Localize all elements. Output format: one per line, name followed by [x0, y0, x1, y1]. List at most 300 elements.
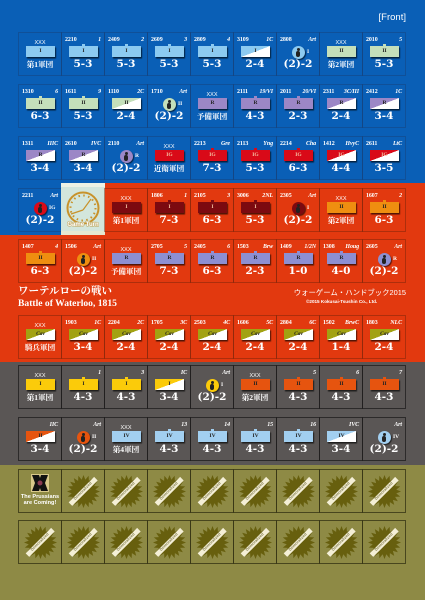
counter: IC: I	[168, 381, 171, 387]
counter: 2011: 2-3	[288, 110, 307, 122]
counter: IV artillery: (2)-2	[370, 443, 398, 455]
counter: French 1st HQ dark	[104, 188, 148, 232]
counter: 3109: 2-4	[246, 58, 264, 70]
counter: Guard Army HQ	[147, 136, 191, 180]
counter: IVC	[319, 417, 363, 461]
counter: 1903: 1903	[65, 320, 77, 326]
counter: IV 13	[147, 417, 191, 461]
marker 6: Demoralized	[287, 481, 308, 501]
counter: 1710 artillery	[147, 84, 191, 128]
counter: 2110 artillery: Art	[136, 141, 144, 147]
counter: IV 14: 14	[224, 422, 230, 428]
counter: II artillery	[61, 417, 105, 461]
counter: 2405: 6	[227, 244, 230, 250]
counter: 2213: 2213	[194, 141, 206, 147]
counter: II 5: 5	[313, 370, 316, 376]
marker 13: Demoralized	[201, 532, 222, 552]
counter: 1606: 1606	[237, 320, 249, 326]
counter: 1412: 4-4	[332, 162, 350, 174]
counter: 1506 artillery: 1506	[65, 244, 77, 250]
marker 10: Demoralized	[72, 532, 93, 552]
marker 2: Demoralized	[115, 481, 136, 501]
counter: 1506 artillery: Art	[93, 244, 101, 250]
label: Front: [Front]	[379, 12, 406, 23]
counter: 1st HQ yellow: 第1軍団	[27, 393, 53, 402]
counter: 2808 artillery: I	[307, 49, 309, 55]
counter: 2213: 7-3	[202, 162, 221, 174]
counter: 2204: Cav	[122, 331, 131, 337]
counter: 2610: 3-4	[74, 162, 92, 174]
counter: II 7: 4-3	[374, 391, 393, 403]
counter: 2412: R	[382, 100, 386, 106]
counter: 3109: 3109	[237, 37, 249, 43]
panel: gray counters	[18, 365, 406, 461]
marker 12	[147, 520, 191, 564]
marker 16: Demoralized	[330, 532, 351, 552]
counter: 3006: 5-3	[246, 214, 264, 226]
counter: I artillery	[190, 365, 234, 409]
counter: 2011: 2011	[280, 89, 291, 95]
counter: 1506 artillery: (2)-2	[69, 265, 97, 277]
counter: 2211 artillery: IG	[49, 205, 55, 211]
counter: II 6: 6	[356, 370, 359, 376]
publication credit: ウォーゲーム・ハンドブック2015	[294, 288, 406, 297]
marker 7: Demoralized	[330, 481, 351, 501]
counter: IV artillery: Art	[394, 422, 402, 428]
counter: 1606: Cav	[251, 331, 260, 337]
counter: II artillery: (2)-2	[69, 443, 97, 455]
counter: 2409	[104, 32, 148, 76]
counter: 2111	[233, 84, 277, 128]
counter: IV 15: 15	[267, 422, 273, 428]
counter: 2311: 3C/III	[344, 89, 359, 95]
counter: 2204: 2C	[137, 320, 144, 326]
counter: 1502: 1502	[323, 320, 335, 326]
counter: 2305 artillery: (2)-2	[284, 214, 312, 226]
blue band	[0, 0, 425, 235]
counter: IC: IC	[181, 370, 187, 376]
counter: 2611: 2611	[366, 141, 377, 147]
counter: II 5: 4-3	[288, 391, 307, 403]
marker 14: Demoralized	[244, 532, 265, 552]
counter: 1407: 4	[55, 244, 58, 250]
counter: IVC: IVC	[349, 422, 359, 428]
counter: 2210: 1	[98, 37, 101, 43]
counter: 1407: II	[38, 255, 43, 261]
counter: 2412	[362, 84, 406, 128]
counter: 1607	[362, 188, 406, 232]
counter: 2111: 2111	[237, 89, 248, 95]
counter: 2105	[190, 188, 234, 232]
counter: 2214: 2214	[280, 141, 292, 147]
counter: 2211 artillery	[18, 188, 62, 232]
counter: 1310: 6-3	[30, 110, 49, 122]
counter: 1110: 2-4	[116, 110, 135, 122]
counter: IVC: 3-4	[332, 443, 350, 455]
counter: Cavalry HQ: Cav	[36, 331, 45, 337]
counter: 2503: 2-4	[202, 341, 221, 353]
counter: I artillery: Art	[222, 370, 230, 376]
counter: 2110 artillery	[104, 136, 148, 180]
counter: 2804: 6C	[309, 320, 316, 326]
counter: 2214: IG	[295, 152, 302, 158]
counter: 1407: 6-3	[30, 265, 49, 277]
title: Japanese: ワーテルローの戦い	[18, 286, 112, 297]
counter: 2412: 1C	[395, 89, 402, 95]
counter: 1412: HvyC	[345, 141, 359, 147]
counter: IV 13: IV	[166, 433, 173, 439]
counter: IV 16	[276, 417, 320, 461]
counter: IVC: IV	[338, 433, 345, 439]
counter: 1st HQ yellow: XXX	[34, 373, 46, 379]
counter: 2010: II	[382, 48, 387, 54]
counter: IV 14	[190, 417, 234, 461]
counter: 2011: 20/VI	[302, 89, 316, 95]
counter: 1803: NLC	[390, 320, 402, 326]
counter: I 3: 3	[141, 370, 144, 376]
counter: 2605 artillery: 2605	[366, 244, 378, 250]
marker 1: Demoralized	[72, 481, 93, 501]
counter: 1806: I	[168, 204, 171, 210]
counter: 2611	[362, 136, 406, 180]
counter: II 6: II	[339, 381, 344, 387]
counter: 2011	[276, 84, 320, 128]
counter: 1st Army HQ	[18, 32, 62, 76]
marker 1	[61, 469, 105, 513]
panel: red counters	[18, 183, 406, 359]
counter: 2405	[190, 239, 234, 283]
counter: IC	[147, 365, 191, 409]
marker 11	[104, 520, 148, 564]
counter: 2409: 5-3	[116, 58, 135, 70]
counter: 2113: Yng	[263, 141, 273, 147]
counter: 2111: R	[254, 100, 257, 106]
counter: 2110 artillery: R	[135, 153, 139, 159]
counter: 1110: II	[124, 100, 129, 106]
counter: 4th HQ	[104, 417, 148, 461]
counter: 2705	[147, 239, 191, 283]
counter: 1506 artillery	[61, 239, 105, 283]
counter: 1611: 5-3	[74, 110, 92, 122]
counter: Guard Army HQ: IG	[166, 152, 173, 158]
counter: 1506 artillery: II	[92, 256, 96, 262]
counter: 2305 artillery: I	[307, 205, 309, 211]
counter: 2110 artillery: 2110	[108, 141, 119, 147]
counter: I artillery: (2)-2	[198, 391, 226, 403]
counter: 1705: 3C	[180, 320, 187, 326]
counter: 1308	[319, 239, 363, 283]
counter: 1903	[61, 315, 105, 359]
counter: 2409: I	[125, 48, 128, 54]
counter: 1110: 2C	[137, 89, 144, 95]
counter: 3006	[233, 188, 277, 232]
counter: IV 14: IV	[209, 433, 216, 439]
counter: IV 13: 13	[181, 422, 187, 428]
counter: 2111: 19/VI	[259, 89, 273, 95]
counter: 1503	[233, 239, 277, 283]
counter: IIC: 3-4	[30, 443, 49, 455]
counter: 1412	[319, 136, 363, 180]
counter: 2204: 2-4	[116, 341, 135, 353]
counter: 2nd HQ orange: 第2軍団	[242, 393, 268, 402]
counter: 2705: 2705	[151, 244, 163, 250]
counter: 1903: 1C	[94, 320, 101, 326]
counter: 2011: R	[296, 100, 300, 106]
counter: 2503: 4C	[223, 320, 230, 326]
counter: 2214: 6-3	[288, 162, 307, 174]
counter: 2105: 6-3	[202, 214, 221, 226]
counter: Reserve HQ: R	[124, 255, 128, 261]
counter: 1311: R	[38, 152, 42, 158]
counter: 2211 artillery: (2)-2	[26, 214, 54, 226]
counter: 1806	[147, 188, 191, 232]
counter: 4th HQ: XXX	[120, 425, 132, 431]
counter: II 5: II	[296, 381, 301, 387]
counter: 1803: 2-4	[374, 341, 393, 353]
counter: Guard Army HQ: XXX	[163, 144, 174, 150]
counter: 1806: 1	[184, 193, 187, 199]
counter: Guard Army HQ: 近衛軍団	[154, 164, 184, 173]
marker 5	[233, 469, 277, 513]
counter: 2010: 5-3	[374, 58, 393, 70]
marker 5: Demoralized	[244, 481, 265, 501]
gray band	[0, 362, 425, 465]
counter: 2010: 5	[399, 37, 402, 43]
counter: 1310: 6	[55, 89, 58, 95]
marker 16	[319, 520, 363, 564]
counter: French 1st HQ dark: XXX	[120, 196, 132, 202]
counter: 1311: 3-4	[30, 162, 49, 174]
panel: French blue counters	[18, 32, 406, 180]
counter: 2610: 2610	[65, 141, 77, 147]
marker 8: Demoralized	[373, 481, 394, 501]
counter: 1409: 1/2N	[304, 244, 316, 250]
counter: 2305 artillery	[276, 188, 320, 232]
counter: 1409	[276, 239, 320, 283]
copyright: ©2015 Kokusai-Tsushin Co., Ltd.	[306, 299, 377, 304]
counter: 1503: R	[254, 255, 257, 261]
counter: 2204: 2204	[108, 320, 120, 326]
counter: 2611: IG	[381, 152, 388, 158]
counter: French 1st HQ dark: 第1軍団	[113, 216, 139, 225]
counter: 1611: II	[81, 100, 86, 106]
counter: 1412: IG	[338, 152, 345, 158]
counter: 2105: 2105	[194, 193, 206, 199]
counter: 1407: 1407	[22, 244, 34, 250]
counter: 1803: 1803	[366, 320, 378, 326]
marker: The Prussians are Coming: The Prussians	[21, 494, 59, 500]
marker 3	[147, 469, 191, 513]
counter: I 1: I	[82, 381, 85, 387]
counter: 2804	[276, 315, 320, 359]
counter: 1308: 4-0	[332, 265, 350, 277]
counter: 2nd Army HQ: II	[339, 48, 344, 54]
counter: 2809: 2809	[194, 37, 206, 43]
counter: 1308: R	[340, 255, 343, 261]
marker 6	[276, 469, 320, 513]
counter: 1705: 1705	[151, 320, 163, 326]
marker 2	[104, 469, 148, 513]
counter: I 1: 1	[98, 370, 101, 376]
marker 7	[319, 469, 363, 513]
counter: 2nd Army HQ orange: 第2軍団	[328, 216, 354, 225]
counter: 1503: Brw	[263, 244, 273, 250]
counter: 3109: 1C	[266, 37, 273, 43]
counter: 1311	[18, 136, 62, 180]
counter: II 6	[319, 365, 363, 409]
counter: I artillery: I	[221, 382, 223, 388]
counter: 2311	[319, 84, 363, 128]
counter: 2111: 4-3	[246, 110, 264, 122]
counter: 2113: IG	[252, 152, 259, 158]
counter: 1611: 1611	[65, 89, 76, 95]
counter: 2214	[276, 136, 320, 180]
counter: Cavalry HQ	[18, 315, 62, 359]
counter: 2311: 2311	[323, 89, 334, 95]
counter: 2211 artillery: Art	[50, 193, 58, 199]
counter: 2808 artillery	[276, 32, 320, 76]
marker 4: Demoralized	[201, 481, 222, 501]
counter: 1311: IIIC	[47, 141, 58, 147]
counter: IC: 3-4	[160, 391, 178, 403]
counter: 2214: Cha	[306, 141, 316, 147]
counter: 1409: 1-0	[288, 265, 307, 277]
counter: 2503: Cav	[208, 331, 217, 337]
counter: 2808 artillery: 2808	[280, 37, 292, 43]
counter: 1710 artillery: (2)-2	[155, 110, 183, 122]
counter: 2804: Cav	[294, 331, 303, 337]
counter: II artillery: Art	[93, 422, 101, 428]
counter: Reserve HQ	[104, 239, 148, 283]
counter: French 1st HQ dark: I	[125, 204, 128, 210]
counter: 2210: 2210	[65, 37, 77, 43]
counter: Cavalry HQ: 騎兵軍団	[25, 343, 55, 352]
counter: 1308: Houg	[345, 244, 359, 250]
counter: II 7	[362, 365, 406, 409]
counter: 2110 artillery: (2)-2	[112, 162, 140, 174]
marker: The Prussians are Coming	[18, 469, 62, 513]
counter: 4th HQ: IV	[123, 433, 130, 439]
counter: IV artillery	[362, 417, 406, 461]
panel: olive markers	[18, 469, 406, 564]
marker 17: Demoralized	[373, 532, 394, 552]
counter: 2605 artillery	[362, 239, 406, 283]
counter: 2605 artillery: R	[393, 256, 397, 262]
counter: 1st Army HQ: 第1軍団	[27, 60, 53, 69]
counter: 1606: 5C	[266, 320, 273, 326]
counter: 2609	[147, 32, 191, 76]
counter: 2412: 2412	[366, 89, 378, 95]
counter: II 7: 7	[399, 370, 402, 376]
counter: 1502: 1-4	[332, 341, 350, 353]
counter: Cavalry HQ: XXX	[34, 323, 46, 329]
counter: 2705: 5	[184, 244, 187, 250]
counter: 1st HQ yellow: I	[39, 381, 42, 387]
counter: 2611: 3-5	[374, 162, 393, 174]
counter: 2010	[362, 32, 406, 76]
counter: 2412: 3-4	[374, 110, 393, 122]
counter: 2609: 3	[184, 37, 187, 43]
counter: 2210: I	[82, 48, 85, 54]
marker 12: Demoralized	[158, 532, 179, 552]
counter: 2609: 5-3	[160, 58, 178, 70]
counter: 2409: 2	[141, 37, 144, 43]
counter: 2010: 2010	[366, 37, 378, 43]
counter: 2804: 2-4	[288, 341, 307, 353]
marker 15: Demoralized	[287, 532, 308, 552]
counter: 1502: BrwC	[345, 320, 359, 326]
counter: 2210: 5-3	[74, 58, 92, 70]
counter: I 3: 4-3	[116, 391, 135, 403]
counter: 1705: Cav	[165, 331, 174, 337]
counter: 2nd HQ orange	[233, 365, 277, 409]
counter: 1607: 6-3	[374, 214, 393, 226]
counter: 2nd Army HQ: 第2軍団	[328, 60, 354, 69]
red band upper right	[61, 183, 425, 235]
counter: 1502	[319, 315, 363, 359]
counter: 2nd HQ orange: XXX	[249, 373, 260, 379]
counter: 2809	[190, 32, 234, 76]
counter: 2nd Army HQ orange	[319, 188, 363, 232]
red band	[0, 235, 425, 362]
counter: I 3: I	[125, 381, 128, 387]
counter: 2311: R	[340, 100, 343, 106]
counter: II 5	[276, 365, 320, 409]
counter: 3006: I	[254, 204, 257, 210]
counter: 1503: 1503	[237, 244, 249, 250]
counter: 1606	[233, 315, 277, 359]
counter: 1806: 7-3	[160, 214, 178, 226]
counter: 1803	[362, 315, 406, 359]
title: English: Battle of Waterloo, 1815	[18, 298, 117, 309]
counter: 2405: 2405	[194, 244, 206, 250]
counter: 2204	[104, 315, 148, 359]
counter: 2804: 2804	[280, 320, 292, 326]
counter: I 3	[104, 365, 148, 409]
counter: 1310	[18, 84, 62, 128]
counter: 1806: 1806	[151, 193, 163, 199]
counter: 1903: Cav	[79, 331, 88, 337]
counter: IV 15: IV	[252, 433, 259, 439]
olive band	[0, 465, 425, 600]
counter: 2503	[190, 315, 234, 359]
counter: IV 13: 4-3	[160, 443, 178, 455]
counter: 1606: 2-4	[246, 341, 264, 353]
counter: Reserve Army HQ: R	[210, 100, 214, 106]
counter: 2609: I	[168, 48, 171, 54]
counter: IV artillery: IV	[393, 434, 399, 440]
counter: 1412: 1412	[323, 141, 335, 147]
counter: 2605 artillery: Art	[394, 244, 402, 250]
marker: The Prussians are Coming: are Coming!	[24, 500, 56, 506]
counter: 2105: I	[211, 204, 214, 210]
counter: 1607: 2	[399, 193, 402, 199]
counter: IV 15	[233, 417, 277, 461]
counter: 2610	[61, 136, 105, 180]
counter: IV 16: 16	[310, 422, 316, 428]
counter: 1409: 1409	[280, 244, 292, 250]
counter: IV 16: IV	[295, 433, 302, 439]
counter: 1311: 1311	[22, 141, 33, 147]
counter: Reserve Army HQ: 予備軍団	[197, 112, 227, 121]
marker 3: Demoralized	[158, 481, 179, 501]
counter: 1308: 1308	[323, 244, 335, 250]
counter: IV 15: 4-3	[246, 443, 264, 455]
counter: II artillery: II	[92, 434, 96, 440]
counter: 2nd HQ orange: II	[253, 381, 258, 387]
counter: 2405: 6-3	[202, 265, 221, 277]
counter: 1st Army HQ: I	[39, 48, 42, 54]
